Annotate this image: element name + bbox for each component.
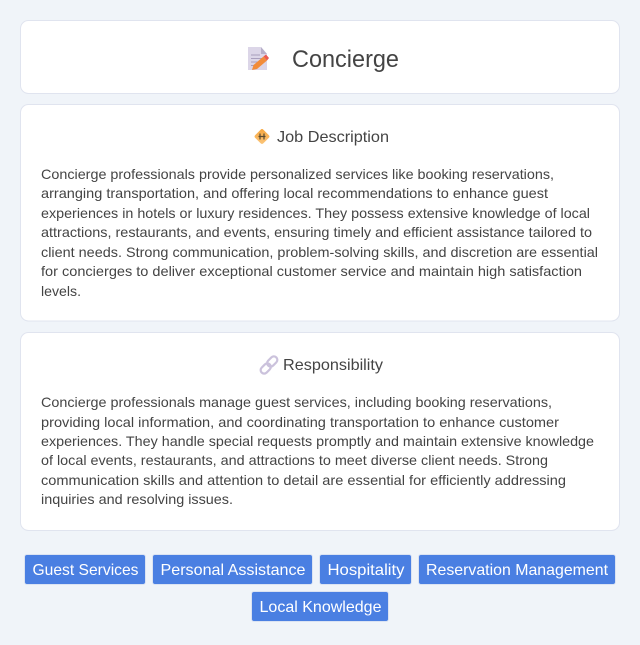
panel: job description: [20, 104, 620, 321]
text block: responsibility: experiences. They handle special requests promptly and maintain extensive knowledge: [41, 433, 594, 449]
tag: reservation management: [418, 554, 616, 584]
title: Concierge: [292, 46, 399, 73]
text block: job description: experiences in hotels or luxury residences. They possess extensive knowledge of local: [41, 205, 590, 221]
text block: job description: attractions, restaurants, and events, ensuring timely and efficient assistance tailored to: [41, 224, 592, 240]
text block: job description: levels.: [41, 283, 81, 299]
panel: responsibility: [20, 332, 620, 530]
icon: chain link: [259, 355, 279, 375]
tag: reservation management: Reservation Management: [426, 562, 609, 579]
tag group: [24, 554, 616, 622]
text block: job description: for concierges to deliver exceptional customer service and maintain high satisfaction: [41, 263, 582, 279]
tag: hospitality: [320, 554, 412, 584]
text block: responsibility: communication skills and attention to detail are essential for efficiently addressing: [41, 472, 566, 488]
icon: orange diamond: [254, 128, 270, 145]
tag: guest services: [24, 554, 146, 584]
text block: responsibility: providing local information, and coordinating transportation to enhance customer: [41, 414, 559, 430]
icon: document with pencil: [248, 47, 269, 70]
tag: local knowledge: [252, 592, 388, 622]
tag: local knowledge: Local Knowledge: [260, 599, 382, 616]
heading: responsibility: Responsibility: [283, 357, 383, 374]
text block: responsibility: [41, 394, 594, 507]
panel: title header: [20, 20, 620, 94]
tag: hospitality: Hospitality: [328, 562, 404, 579]
text block: responsibility: of local events, restaurants, and attractions to meet diverse client needs. Strong: [41, 452, 548, 468]
text block: responsibility: Concierge professionals manage guest services, including booking reservations,: [41, 394, 552, 410]
text block: job description: [41, 166, 598, 299]
text block: job description: Concierge professionals provide personalized services like booking reservations,: [41, 166, 554, 182]
text block: job description: arranging transportation, and offering local recommendations to enhance guest: [41, 185, 548, 201]
text block: job description: client needs. Strong communication, problem-solving skills, and discretion are essential: [41, 244, 598, 260]
heading: job description: Job Description: [277, 129, 389, 146]
tag: personal assistance: Personal Assistance: [160, 562, 306, 579]
tag: personal assistance: [152, 554, 312, 584]
tag: guest services: Guest Services: [32, 562, 138, 579]
text block: responsibility: inquiries and resolving issues.: [41, 491, 233, 507]
